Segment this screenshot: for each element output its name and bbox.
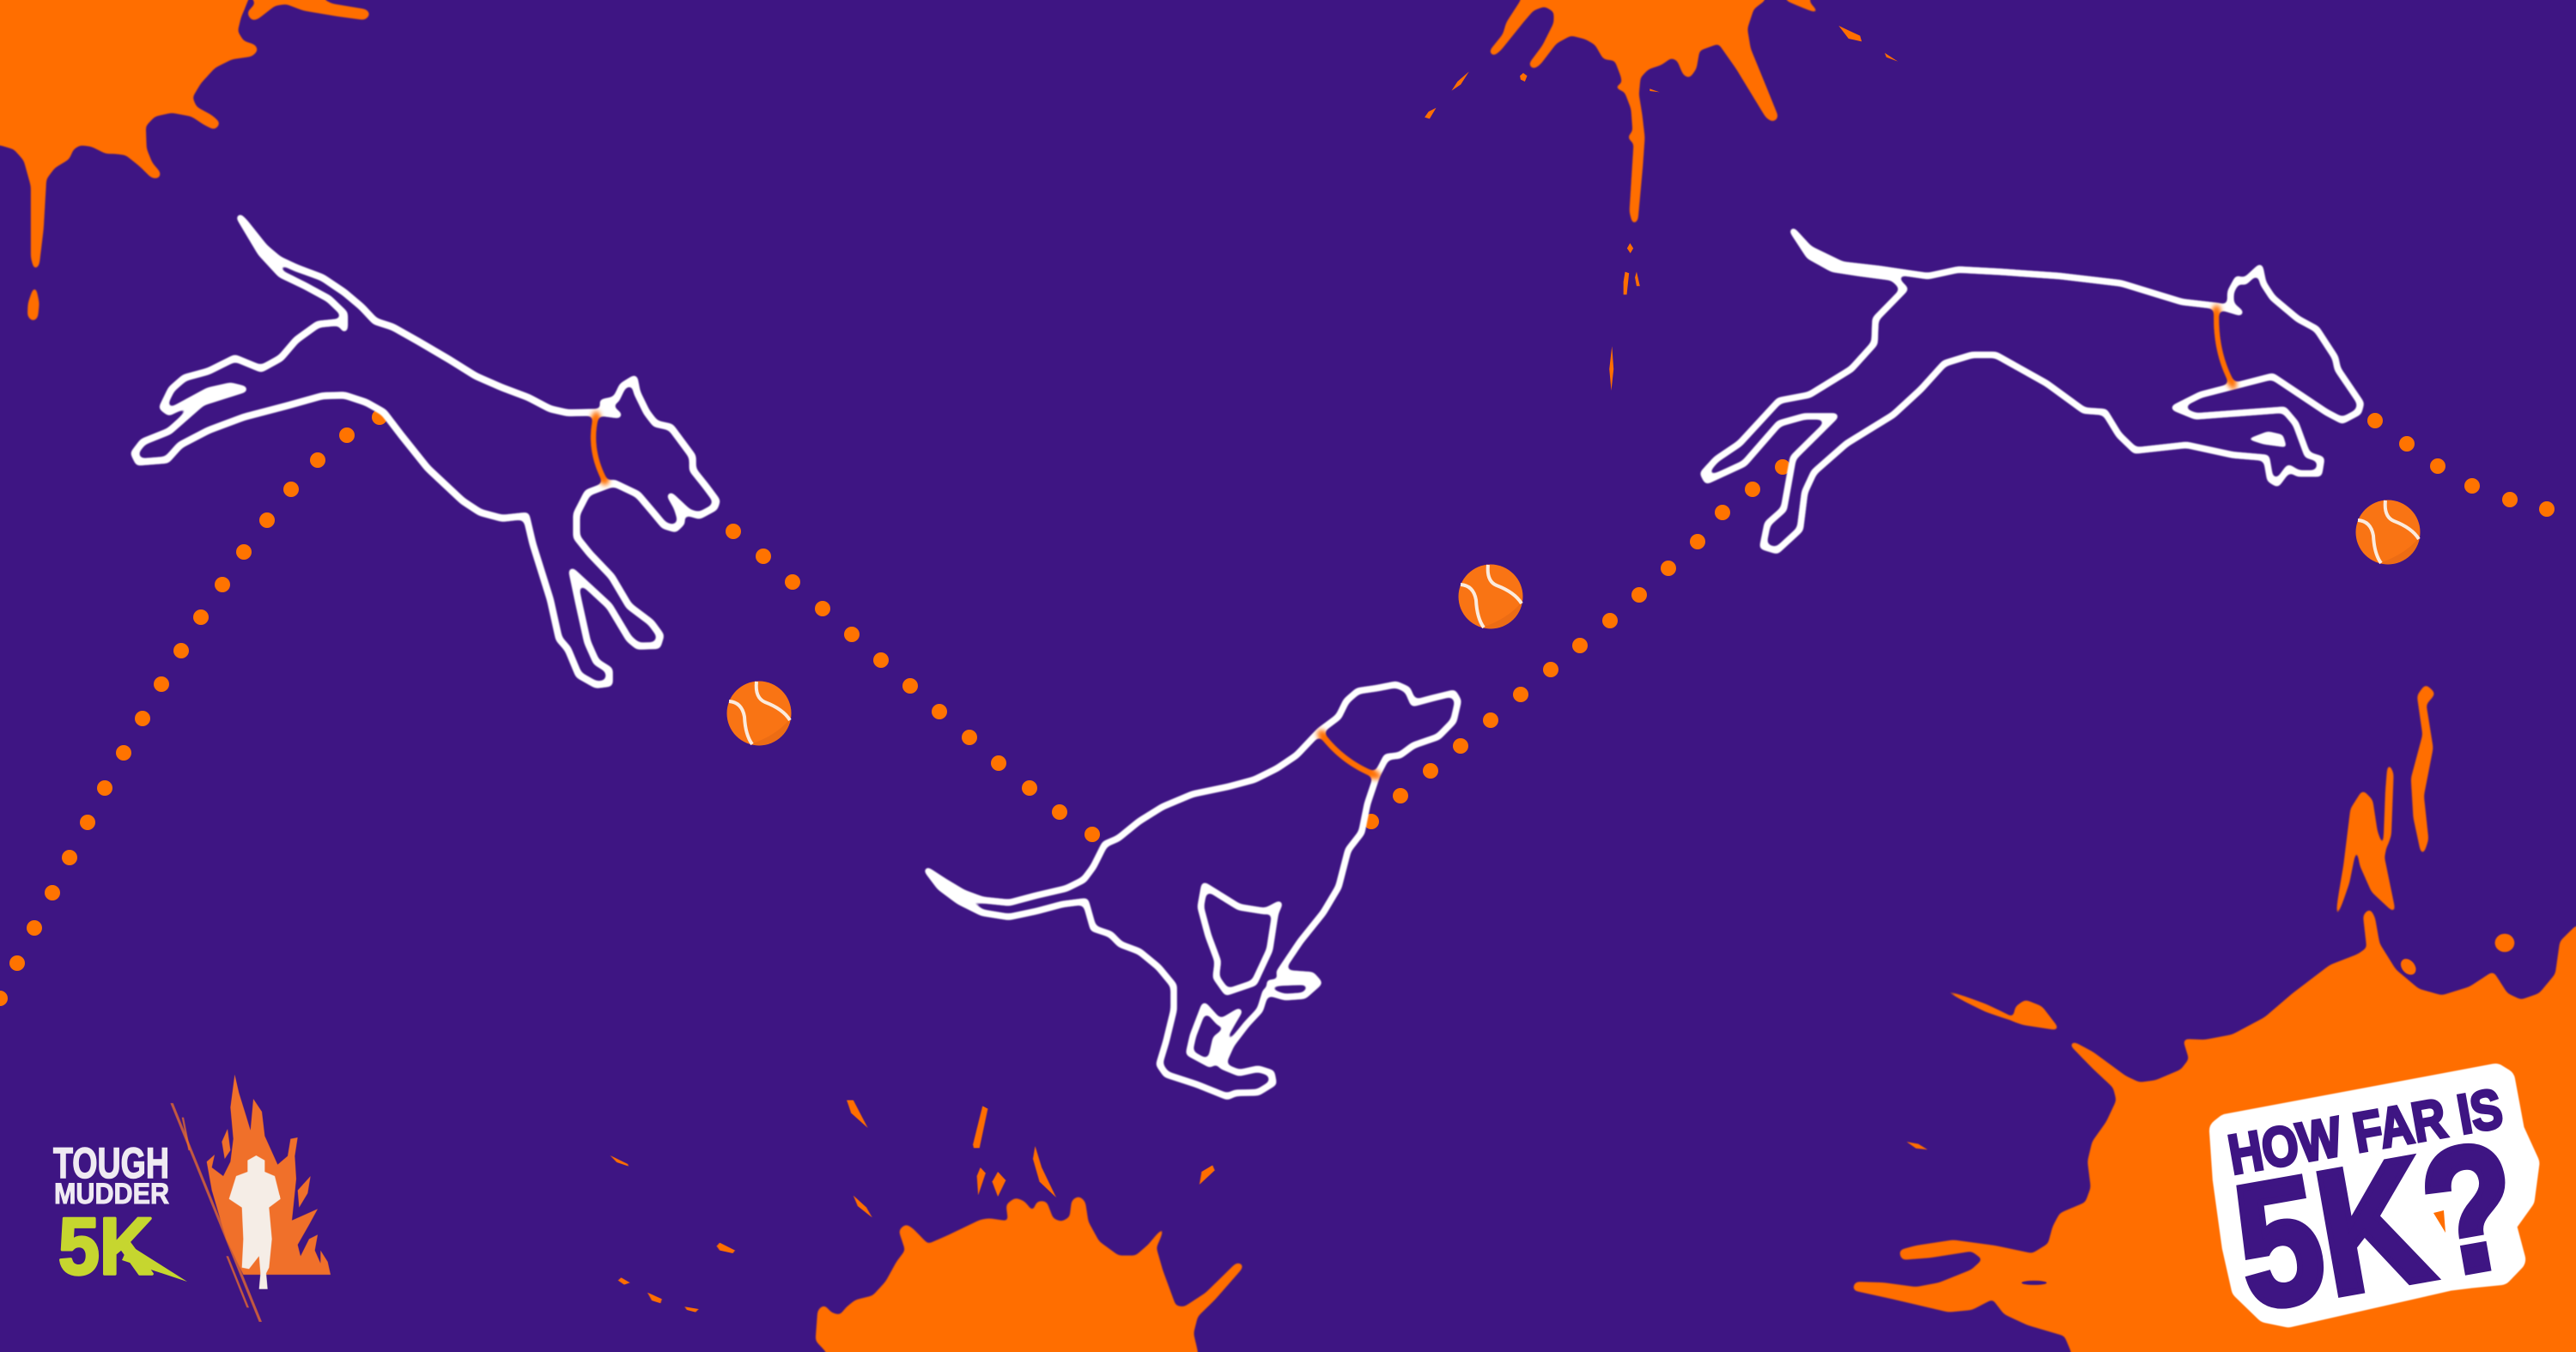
droplets: bottom right [1906,934,2514,1285]
ball: near first dog [726,682,792,745]
dog: running centre [925,684,1458,1097]
droplets: bottom centre [611,1100,1215,1313]
dotted trail: lower left to first dog [0,409,387,1006]
logo flame with runner [170,1075,331,1322]
logo: Tough Mudder 5K [53,1075,331,1322]
sticker: how far is 5K?: 5K? [2222,1104,2532,1347]
logo wordmark: TOUGH [53,1139,169,1187]
ball: above second dog [1458,565,1523,628]
dog: leaping right [1704,229,2360,551]
ball: near third dog [2356,500,2420,565]
sticker: how far is 5K?: HOW FAR IS [2224,1076,2507,1186]
dotted trail: second dog to third dog [1364,459,1790,829]
dotted trail: first dog to second dog [726,524,1100,842]
dog: leaping left [134,215,717,685]
dotted trail: third dog to right edge [2367,413,2555,517]
logo wordmark [53,1139,187,1291]
droplets: top centre [1425,26,1898,391]
splat: bottom right [1853,685,2576,1352]
splat: top centre [1490,0,1820,225]
splat: top left [0,0,370,321]
logo wordmark: 5K [58,1201,153,1291]
splat: bottom centre [816,1197,1243,1352]
logo wordmark: MUDDER [54,1178,169,1210]
